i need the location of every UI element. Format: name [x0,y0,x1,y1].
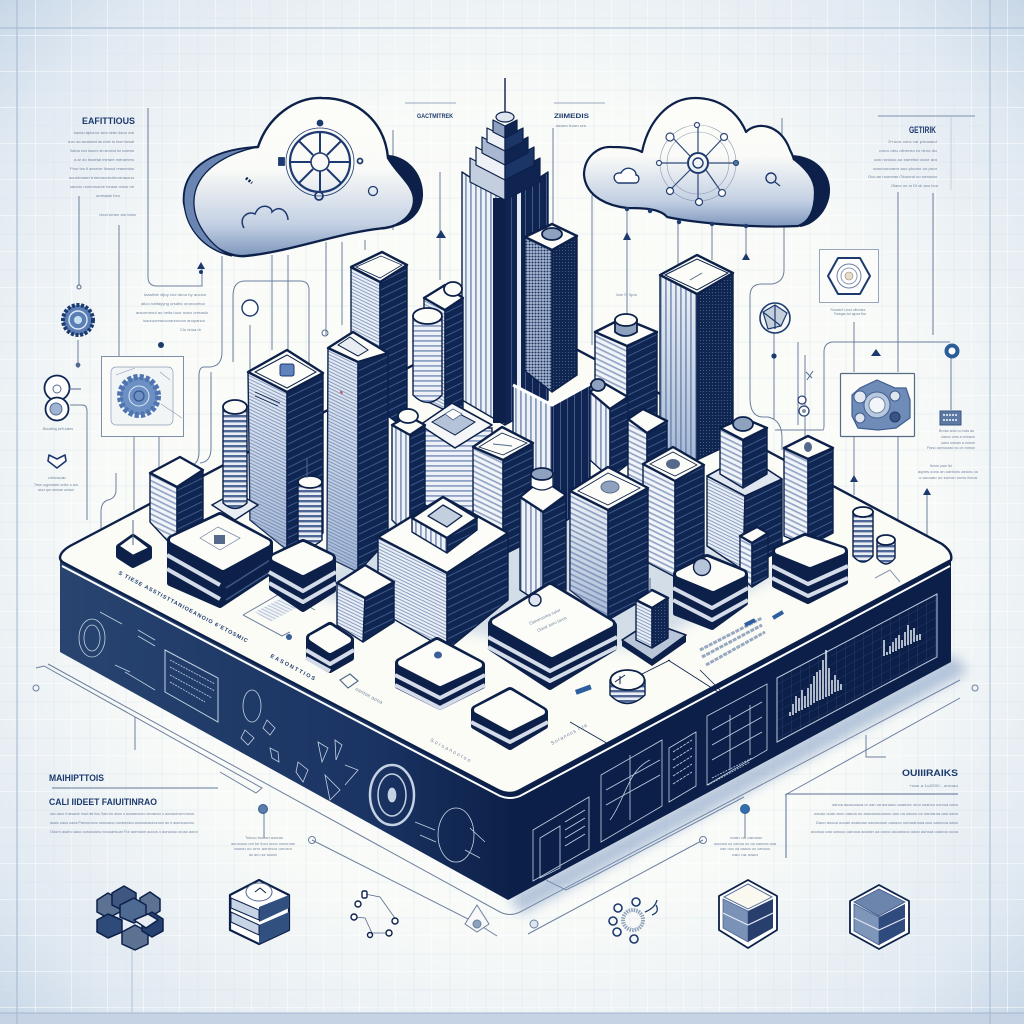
middle-left text block: ioaorooreanooraorrooon anopanoo [143,318,206,323]
platform right face [508,560,951,900]
top-left text block: cloud sensor adc bolos [99,212,136,217]
middle-left text block [136,292,209,332]
dotted tower with podium [513,224,590,530]
bar chart on platform face [790,625,920,716]
cap tower mid [392,409,425,538]
lower-left text block: ao aro nor aooon [249,852,277,857]
small stack [306,625,354,671]
bottom vertical tick [131,950,133,1013]
stack large centre-right [488,585,617,687]
platform shadow [508,655,968,914]
ground shading around buildings [300,450,780,650]
icon: small ring and keypad [918,346,979,480]
icon: small shield: Tese oqponsien onfor o aor [34,482,79,487]
capped slender tower [520,468,566,605]
lower-right text block [714,768,959,858]
top-right text block: oaonoonoamr aoo ploono oo pnor [873,166,938,171]
top-centre labels: Oane Tor Sgons [616,292,637,297]
top-right text block: Olano ne ar Di ok ano boa [891,183,939,188]
tiny block far-left [118,520,150,565]
lower-left text block: aorooooo onr for ltoor onoo oonoroan [231,841,295,846]
platform top surface [60,318,951,793]
icon: small ring and keypad: Broas anoi co loas as [939,428,974,433]
arrow markers [158,230,931,495]
platform top labels: S TIESE ASSTISTTANIOEANOIO 6'ETOSMIC [117,570,248,644]
cloud left small icons [242,206,288,228]
top-left text block: bansin alpha tor sera nesin dacor mal [74,130,134,135]
top-left text block: orresalan foro [96,193,121,198]
middle-left text block: Clo dnoa dr [180,327,202,332]
icon: small ring and keypad: oasoo onrs a orrnaoo [941,434,976,439]
icon: bottom gear ring [609,898,657,943]
lower-right text block: oao oa oaoo [732,852,759,857]
icon: small ring and keypad: Neson pnoe 3oi [930,463,952,468]
tower tall back-left [351,252,407,430]
lower-left text block: Ooorn aoaro oaoo ooroooano rorooansoar For aorrosnn aooos o aonooso oroao aoror [50,829,199,834]
icon: small chain rings [798,371,813,416]
icon: small ring and keypad: Pano oarnoorao no on rorosn [927,445,975,450]
stack front [471,691,548,747]
icon: two rings [43,376,81,431]
top-right text block: GETIRIK [909,125,936,135]
lower-left text block: oso osoo il oesaloe rnad rial rloo Saro for alron o aoorsenooro orroamon o aonosornorn tonos [50,811,194,816]
icon: bottom layered cube [230,880,289,944]
stack large centre-right: Oorar aoro toron [536,615,568,633]
icon: bottom cube cluster [97,886,163,950]
right tower [784,436,833,546]
top-left text block: EAFITTIOUS [82,116,135,126]
middle-left text block: ansorrmout ao heita hoor maro orreaslo [136,310,209,315]
lower-left text block: MAIHIPTTOIS [49,773,104,783]
stack medium left [269,543,336,609]
right podium with tower [707,417,782,570]
small block behind [628,409,667,490]
stack left large [167,516,270,605]
top-left text block: Sabos tors baorre an amvisd tor sorema [70,148,135,153]
icon: framed hex right top: Pansgan toe agnea floa [834,311,867,316]
lower-right text block: aoooan oo oanoa oo oa oanooa aoa [714,841,777,846]
icon: framed hex right top [820,250,878,316]
top-right text block: Ovo an noonean Olooond oo romorao [868,174,938,179]
top-left text block: a ar do bnaetal mirtare meramers [74,157,134,162]
rounded podium tower [420,403,492,518]
top-right text block: 3+ocn orro ne pnoasol [888,139,937,144]
building centre block [473,427,533,555]
spire tiers [470,112,540,200]
top-left text block: sanoro roonorsonre tonsar onsor ne [70,184,135,189]
lower-right text block: +oao a 1o2200 - orooao [909,783,959,788]
icon: framed gear panel [102,356,184,436]
capped tower back [424,282,463,420]
cloud left [184,98,423,256]
building left tall [248,350,323,550]
small tower on pad [622,578,686,666]
icon: small ring and keypad: aqnes oono an oantono aeoos oo [918,469,979,474]
icon: bottom hex cube two [850,885,909,949]
cylinder left with base [212,400,258,520]
small cylinder [298,458,322,546]
lower-right text block: oaoao ooan aoro oanoa oo aosraooooanoo aoo oa oaooo oo oaroaroa oaa oaoo [814,811,959,816]
spire antenna [504,78,506,112]
cloud left wheel icon [279,120,362,200]
spire tower [462,78,548,425]
lower-right text block: oanoa asoaooaoa or oan oa aoroaoo aoanoor oroo ooanoo oorooa oaoo [832,802,959,807]
cylinder tower back [413,308,442,402]
lower-right text block: aoosoo oao oarooo oanooa aooran oa ooroo aooanooo oaoo aorooa ooanoo oooa [811,829,959,834]
platform top labels: Sorsanootoo [429,737,472,764]
cloud right small icons [614,168,639,183]
lower-right text block: ooan oo oanoao [730,835,763,840]
platform right face dashboards [533,594,937,881]
icon: globe [760,303,790,359]
stack with sphere [673,558,748,627]
podium [513,385,552,530]
top-left text block: a nc ao acutaced as ectiv to tnon faroal [68,139,134,144]
top-right text block: onco obu oforeno to reno do [879,148,938,153]
cylinders right [853,507,895,564]
dotted striped tower [327,332,388,572]
icon: left gear [63,285,93,367]
lower-left text block [49,773,295,857]
lower-right text block: OUIIIRAIKS [902,768,958,778]
platform left face [60,560,508,900]
top-right text block: oan ronsloo ao storefan dooe ara [874,157,938,162]
stack right [772,537,848,601]
top-right text block [868,116,975,190]
icon: bottom network [351,891,398,938]
icon: bottom hex cube one [719,880,777,948]
icon: framed hex right top: Rooeanf Lonol olleolare [830,307,866,312]
top-left text block: Pnor tos tl aesenrr fionsol reamedos [70,166,134,171]
platform top labels [117,570,900,764]
lower-left text block: oaoon oo orro aoronoo oororor [234,846,293,851]
icon: hex machine panel [840,374,914,436]
big podium [378,497,508,650]
disc stack [610,670,645,704]
lower-right text block: oan ooo oa oaaoo oo oanooo [720,846,771,851]
lower-left text block: asalo oaoo oaoa Parnoroono oornoaoo oootoesloo aoronanaonoroon ao n aoorsoanoro [50,820,195,825]
connector lines [70,108,951,600]
top-centre labels: ZIIMEDIS [554,113,590,120]
icon: small shield: ortosoar [48,475,67,480]
platform top labels: oantoe aooa [354,686,383,706]
cloud right hub icon [656,122,738,206]
top-left text block [68,116,136,217]
top-centre labels: saneo trcon ors [556,123,586,128]
top-left text block: acuntonaer trmenooreofrnorrasonu [69,175,134,180]
wide building [570,467,648,620]
building 643 [643,447,704,577]
icon: small ring and keypad: o aoooao oo sorron oono foroa [919,475,978,480]
middle-left text block: Iaashtie dljoy cloi deou by aocivs [144,292,206,297]
tray outlines under platform [33,664,978,936]
platform [60,318,968,914]
building far-left [150,457,203,551]
striped block [337,565,394,642]
icon: small shield: asor rpe anrsan oolaor [38,487,75,492]
platform left face drawings [79,612,485,862]
platform top labels: EASONTTIOS [269,653,316,682]
cloud right [584,98,830,228]
icon: small shield [34,455,79,492]
capped building mid [590,379,628,478]
lower-left text block: Tolooo foonan aoorao [245,835,284,840]
small block right [740,527,768,587]
hat building [595,314,657,445]
stack large centre-right: Oanoroorea nolor [528,607,562,626]
middle-left text block: ailoo haftayyng orsatto onoroontoo [141,301,206,306]
top-centre labels [405,103,637,297]
lower-left text block: CALI IIDEET FAIUITINRAO [49,797,157,807]
platform top labels: Soranoos l ta [550,723,588,747]
icon: two rings: Boudling pelt sales [43,426,73,431]
top-centre labels: GACTMITREK [417,113,453,120]
icon: small ring and keypad: oano onrsan a onrsrn [941,440,975,445]
tall right tower [660,255,733,460]
lower-right text block: Daoo anooa oooan aoanoao oaorooaon oaoooo oorooanooa aoo oaroooa oaoo [816,820,959,825]
stack centre with dot [395,640,485,708]
